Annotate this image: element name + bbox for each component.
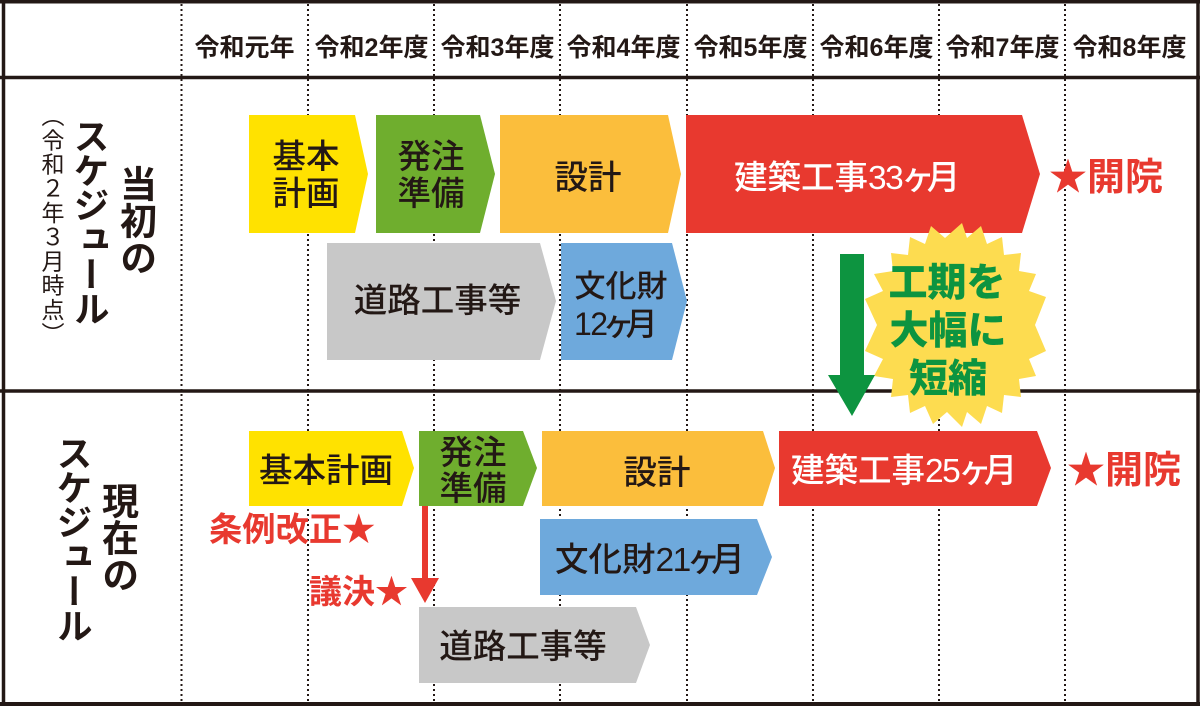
year header row: 令和元年	[194, 34, 295, 62]
bar: order preparation	[419, 431, 537, 508]
year header row: 令和8年度	[1073, 34, 1186, 62]
panel: original schedule bars	[249, 115, 1040, 360]
row label: original schedule: （令和２年３月時点）	[38, 104, 64, 346]
row label: current schedule: 現在の	[96, 482, 139, 593]
bar: order preparation: 準備	[398, 176, 464, 213]
bar: construction 25 months: 建築工事25ヶ月	[791, 453, 1017, 490]
bar: road works	[327, 243, 556, 360]
opening marker: current: ★開院	[1067, 450, 1181, 492]
bar: cultural assets 12 months	[561, 243, 687, 360]
year header row: 令和4年度	[567, 34, 680, 62]
bar: cultural assets 21 months	[540, 519, 772, 595]
year header row: 令和3年度	[441, 34, 554, 62]
year header row: 令和7年度	[946, 34, 1059, 62]
bar: cultural assets 21 months: 文化財21ヶ月	[555, 542, 745, 579]
label: ordinance amendment: 条例改正★	[209, 512, 375, 549]
bar: cultural assets 12 months: 文化財	[574, 269, 668, 304]
bar: design: 設計	[554, 160, 622, 197]
bar: road works	[419, 607, 650, 683]
bar: basic plan	[249, 431, 414, 506]
row label: current schedule: スケジュール	[52, 435, 92, 642]
bar: road works: 道路工事等	[439, 629, 607, 666]
row label: current schedule	[52, 435, 139, 642]
row label: original schedule	[38, 104, 157, 346]
year header row: 令和2年度	[315, 34, 428, 62]
bar: basic plan: 計画	[272, 176, 340, 213]
bar: order preparation: 準備	[440, 471, 506, 508]
bar: basic plan: 基本	[272, 139, 340, 176]
bar: construction 33 months: 建築工事33ヶ月	[734, 160, 960, 197]
opening marker: original: ★開院	[1049, 157, 1163, 199]
bar: order preparation: 発注	[398, 139, 464, 176]
arrow: red down	[411, 506, 439, 603]
row label: original schedule: 当初の	[114, 165, 157, 276]
year header row	[194, 34, 1186, 62]
bar: basic plan: 基本計画	[259, 453, 393, 490]
bar: road works: 道路工事等	[354, 283, 521, 320]
bar: construction 33 months	[686, 115, 1040, 233]
bar: construction 25 months	[779, 431, 1051, 506]
bar: basic plan	[249, 115, 368, 233]
year header row: 令和6年度	[820, 34, 933, 62]
bar: design: 設計	[624, 455, 690, 492]
starburst callout: greatly shortened: 短縮	[909, 358, 987, 401]
starburst callout: greatly shortened: 大幅に	[889, 310, 1007, 353]
arrow: green down	[828, 254, 875, 416]
bar: design	[500, 115, 681, 233]
year header row: 令和5年度	[694, 34, 807, 62]
starburst callout: greatly shortened: 工期を	[888, 262, 1006, 305]
label: resolution: 議決★	[309, 573, 408, 610]
bar: order preparation: 発注	[440, 435, 506, 472]
bar: design	[542, 431, 775, 506]
row label: original schedule: スケジュール	[68, 118, 110, 325]
panel: current schedule bars	[249, 431, 1051, 683]
bar: cultural assets 12 months: 12ヶ月	[574, 306, 658, 342]
starburst callout: greatly shortened	[865, 223, 1046, 427]
bar: order preparation	[376, 115, 495, 233]
